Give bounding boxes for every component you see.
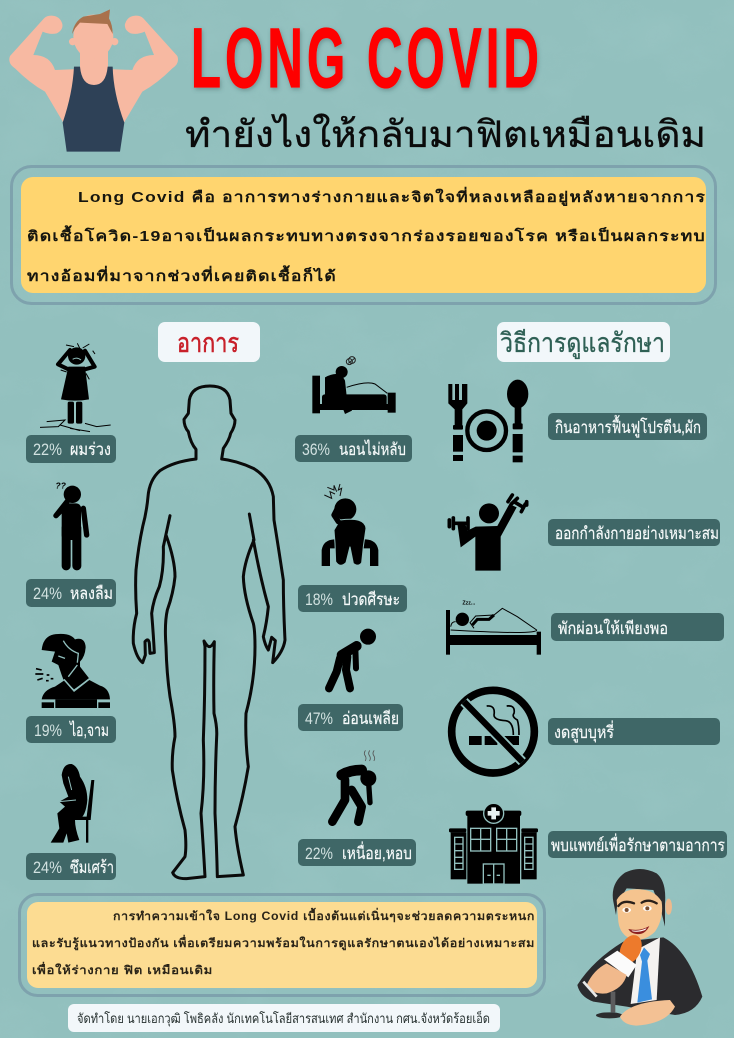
label: headache: 18% (305, 590, 333, 609)
label: forgetfulness (26, 579, 116, 607)
icon: insomnia bed (312, 357, 396, 414)
label: fatigue (298, 704, 403, 731)
definition text (27, 186, 706, 285)
icon: headache (322, 484, 378, 566)
icon: weak person (329, 629, 376, 688)
label: shortness of breath: 22% (305, 844, 333, 863)
definition text: ติดเชื้อโควิด-19อาจเป็นผลกระทบทางตรงจากร่องรอยของโรค หรือเป็นผลกระทบ (27, 225, 706, 245)
label: cough (26, 716, 116, 743)
body outline (133, 386, 285, 879)
conclusion text: การทำความเข้าใจ Long Covid เบื้องต้นแต่เนิ่นๆจะช่วยลดความตระหนก (113, 907, 535, 923)
label: depression (26, 853, 116, 880)
label: insomnia: นอนไม่หลับ (339, 439, 406, 459)
label: cough: ไอ,จาม (69, 720, 109, 740)
label: forgetfulness: หลงลืม (70, 584, 113, 603)
label: hair loss: 22% (33, 440, 62, 459)
icon: news reporter (577, 869, 702, 1026)
icon: food (448, 380, 528, 462)
label: insomnia (295, 435, 412, 462)
label: eat protein and vegetables (548, 413, 707, 440)
label: shortness of breath (298, 839, 416, 866)
label: headache: ปวดศีรษะ (342, 590, 400, 609)
icon: forgetful person: ?? (55, 481, 67, 491)
icon: muscular man (9, 9, 178, 152)
label: rest (551, 613, 724, 641)
conclusion text: เพื่อให้ร่างกาย ฟิต เหมือนเดิม (32, 961, 213, 977)
label: hair loss (26, 435, 116, 463)
icon: no smoking (452, 690, 534, 773)
heading: symptoms: อาการ (177, 328, 239, 358)
heading: care methods (497, 322, 670, 362)
icon: hospital (449, 803, 538, 884)
heading: symptoms (158, 322, 260, 362)
label: exercise (548, 519, 720, 546)
conclusion text: และรับรู้แนวทางป้องกัน เพื่อเตรียมความพร้อมในการดูแลรักษาตนเองได้อย่างเหมาะสม (32, 934, 535, 951)
subtitle: ทำยังไงให้กลับมาฟิตเหมือนเดิม (185, 113, 706, 155)
heading: care methods: วิธีการดูแลรักษา (500, 328, 665, 359)
icon: sleeping in bed (446, 601, 541, 655)
icon: exhausted person (332, 751, 376, 822)
label: cough: 19% (34, 721, 62, 740)
label: fatigue: 47% (305, 709, 333, 728)
icon: depressed woman on chair (51, 764, 94, 843)
icon: coughing man (35, 634, 110, 708)
definition text: Long Covid คือ อาการทางร่างกายและจิตใจที่หลงเหลืออยู่หลังหายจากการ (78, 186, 706, 206)
definition text: ทางอ้อมที่มาจากช่วงที่เคยติดเชื้อก็ได้ (27, 265, 337, 285)
panel: conclusion (20, 894, 544, 996)
label: headache (298, 585, 407, 612)
label: hair loss: ผมร่วง (70, 440, 111, 459)
panel: definition (12, 166, 716, 304)
label: eat protein and vegetables: กินอาหารฟื้นฟูโปรตีน,ผัก (555, 415, 701, 438)
label: rest: พักผ่อนให้เพียงพอ (558, 618, 668, 638)
credit (68, 1004, 500, 1032)
icon: forgetful person (55, 481, 87, 570)
label: depression: ซึมเศร้า (70, 858, 114, 877)
label: quit smoking: งดสูบบุหรี่ (554, 720, 614, 743)
icon: hair loss (40, 343, 111, 432)
credit: จัดทำโดย นายเอกวุฒิ โพธิคลัง นักเทคโนโลยีสารสนเทศ สำนักงาน กศน.จังหวัดร้อยเอ็ด (77, 1009, 490, 1027)
label: shortness of breath: เหนื่อย,หอบ (342, 841, 412, 863)
icon: sleeping in bed: Zzz... (462, 601, 476, 607)
label: insomnia: 36% (302, 440, 330, 459)
label: depression: 24% (33, 858, 62, 877)
label: quit smoking (548, 718, 720, 745)
label: see a doctor (548, 831, 727, 858)
icon: exercise (449, 495, 527, 571)
conclusion text (32, 907, 535, 977)
label: forgetfulness: 24% (33, 584, 62, 603)
label: fatigue: อ่อนเพลีย (342, 709, 399, 728)
